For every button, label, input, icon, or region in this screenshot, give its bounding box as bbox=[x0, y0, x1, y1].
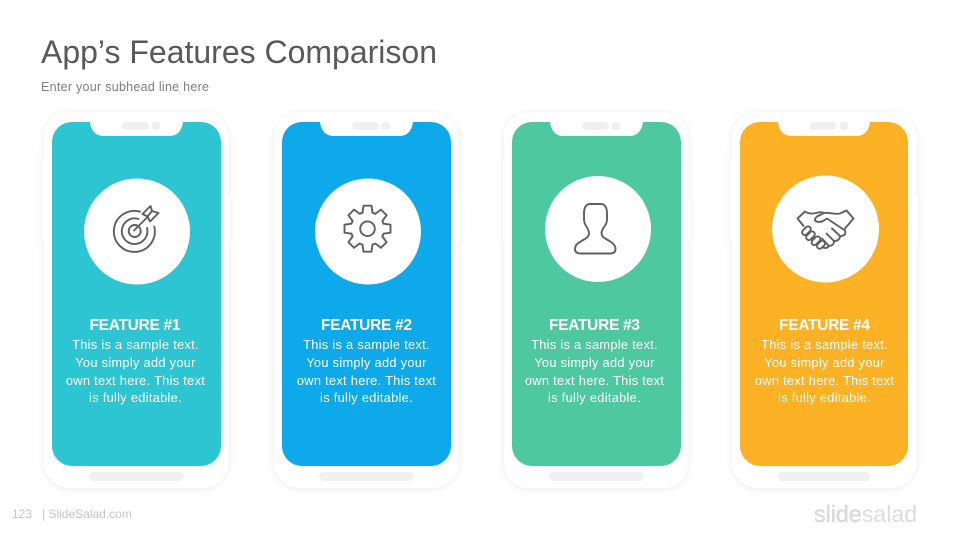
feature 3 text bbox=[525, 317, 664, 405]
icon: handshake bbox=[798, 210, 854, 250]
title: App’s Features Comparison bbox=[41, 34, 437, 70]
feature 4 text: You simply add your bbox=[764, 355, 885, 370]
logo wordmark: slidesalad bbox=[814, 501, 917, 527]
feature 3 text: own text here. This text bbox=[525, 373, 664, 388]
speaker and camera bbox=[810, 122, 848, 130]
icon: target bbox=[114, 206, 158, 252]
home bar bbox=[549, 472, 644, 481]
feature 4 text: own text here. This text bbox=[755, 373, 894, 388]
subhead: Enter your subhead line here bbox=[41, 80, 209, 94]
feature 1 text: This is a sample text. bbox=[72, 337, 199, 352]
icon: person bbox=[575, 204, 616, 254]
phone frame bbox=[43, 112, 230, 488]
feature 4 text bbox=[755, 317, 894, 405]
icon circle bbox=[315, 178, 421, 284]
feature 2 text: FEATURE #2 bbox=[321, 317, 412, 334]
feature 1 text: own text here. This text bbox=[66, 373, 205, 388]
phone 3: feature 3 bbox=[503, 112, 690, 488]
phone frame bbox=[503, 112, 690, 488]
home bar bbox=[778, 472, 870, 481]
phone 1: feature 1 bbox=[43, 112, 230, 488]
feature 4 text: is fully editable. bbox=[778, 390, 871, 405]
phone 4: feature 4 bbox=[731, 112, 918, 488]
home bar bbox=[319, 472, 414, 481]
feature 2 text: This is a sample text. bbox=[303, 337, 430, 352]
feature 2 text: own text here. This text bbox=[297, 373, 436, 388]
feature 3 text: This is a sample text. bbox=[531, 337, 658, 352]
feature 4 text: FEATURE #4 bbox=[779, 317, 870, 334]
speaker and camera bbox=[352, 122, 390, 130]
feature 1 text bbox=[66, 317, 205, 405]
feature 2 text: You simply add your bbox=[306, 355, 427, 370]
phone frame bbox=[273, 112, 460, 488]
speaker and camera bbox=[582, 122, 620, 130]
feature 2 text: is fully editable. bbox=[320, 390, 413, 405]
feature 3 text: You simply add your bbox=[534, 355, 655, 370]
amber screen bbox=[740, 122, 908, 466]
feature 1 text: You simply add your bbox=[75, 355, 196, 370]
feature 2 text bbox=[297, 317, 436, 405]
phone frame bbox=[731, 112, 918, 488]
green screen bbox=[512, 122, 681, 466]
icon: gear bbox=[344, 206, 390, 252]
feature 3 text: FEATURE #3 bbox=[549, 317, 640, 334]
home bar bbox=[89, 472, 184, 481]
icon circle bbox=[545, 176, 651, 282]
feature 1 text: is fully editable. bbox=[89, 390, 182, 405]
speaker and camera bbox=[122, 122, 160, 130]
icon circle bbox=[772, 176, 879, 282]
phone 2: feature 2 bbox=[273, 112, 460, 488]
page number and site footer: 123 | SlideSalad.com bbox=[12, 507, 132, 521]
feature 4 text: This is a sample text. bbox=[761, 337, 888, 352]
icon circle bbox=[84, 178, 190, 284]
feature 3 text: is fully editable. bbox=[548, 390, 641, 405]
feature 1 text: FEATURE #1 bbox=[90, 317, 181, 334]
teal screen bbox=[52, 122, 221, 466]
blue screen bbox=[282, 122, 451, 466]
